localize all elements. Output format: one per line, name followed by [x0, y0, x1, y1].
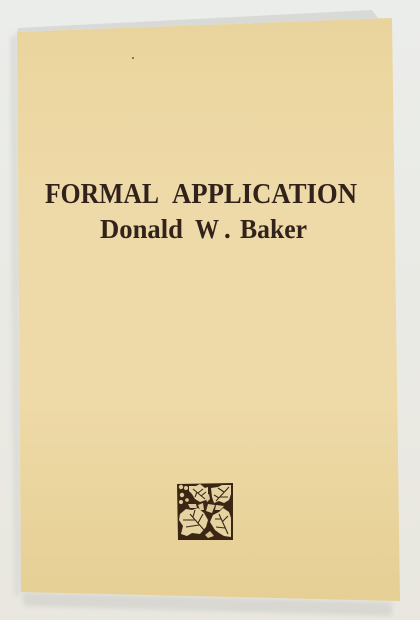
author: W — [195, 214, 219, 244]
top page edge — [17, 10, 392, 32]
leaf veins — [183, 487, 229, 534]
author: Baker — [240, 214, 307, 244]
author: . — [224, 214, 231, 244]
speck on cover — [132, 57, 134, 59]
left shadow — [10, 32, 22, 598]
icon: leaf emblem — [177, 483, 233, 540]
center fragments — [188, 494, 224, 513]
leaf: bottom right — [210, 508, 231, 537]
author — [100, 214, 307, 244]
leaf: bottom left — [179, 508, 208, 536]
leaf: top left — [189, 484, 208, 502]
title: FORMAL — [45, 179, 159, 210]
author: Donald — [100, 214, 183, 244]
bottom shadow — [22, 592, 392, 616]
berries — [179, 485, 189, 504]
title — [45, 179, 357, 210]
title: APPLICATION — [172, 179, 357, 210]
leaf: top right — [211, 485, 231, 503]
